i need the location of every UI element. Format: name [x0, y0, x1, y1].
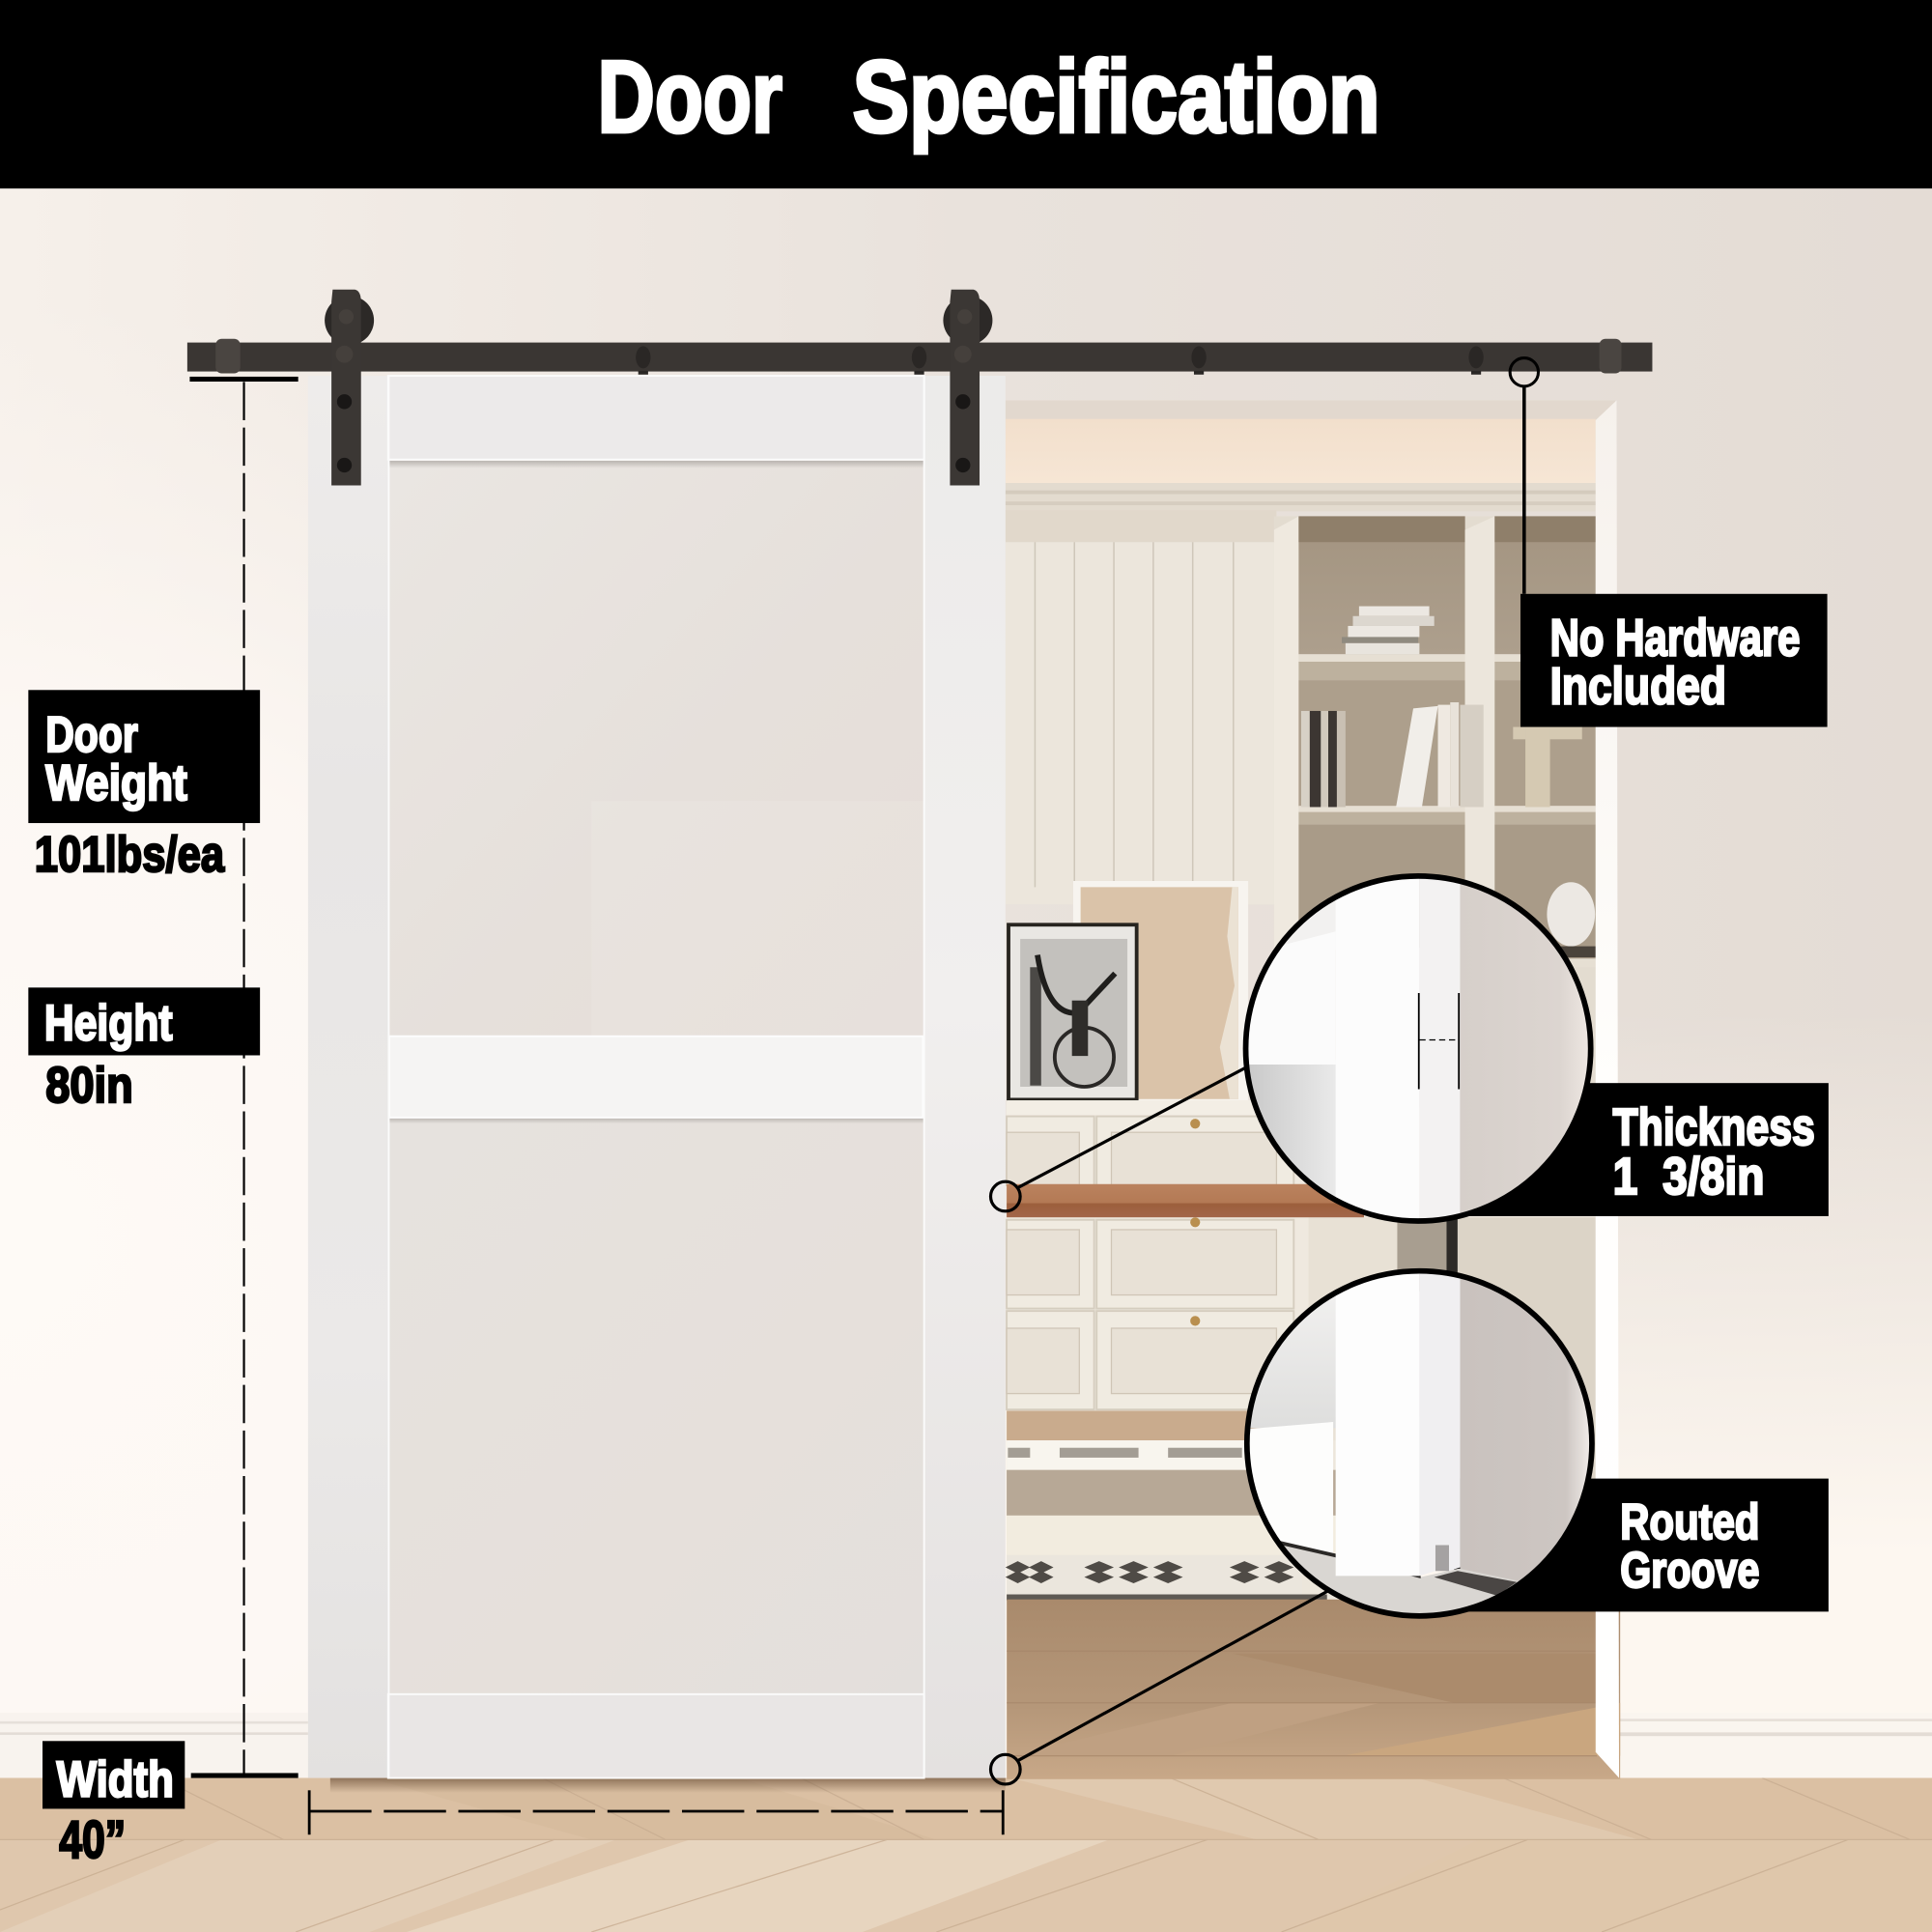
wood countertop	[1007, 1184, 1364, 1217]
left hanger	[325, 290, 374, 486]
lower panel	[389, 1118, 924, 1694]
right stile	[924, 376, 1006, 1778]
ceiling glow	[1006, 419, 1596, 483]
thickness measure marks	[1419, 993, 1459, 1090]
leader: thickness	[991, 1067, 1247, 1211]
label: no hardware included: Included	[1550, 658, 1726, 715]
barn door track	[187, 339, 1652, 375]
label: routed groove: Groove	[1620, 1543, 1759, 1599]
label: no hardware included: No Hardware	[1550, 611, 1801, 668]
value: height: 80in	[45, 1058, 133, 1114]
label: no hardware included	[1520, 594, 1828, 727]
right hanger	[943, 290, 992, 486]
label: width	[43, 1741, 185, 1808]
title: Specification	[853, 40, 1380, 154]
middle rail	[389, 1037, 923, 1118]
doorway soffit	[1006, 401, 1615, 420]
door shadow on floor	[330, 1778, 1006, 1793]
lower cabinets	[1007, 1115, 1596, 1489]
books	[1301, 607, 1484, 807]
label: width: Width	[57, 1752, 174, 1808]
label: thickness: Thickness	[1613, 1099, 1815, 1156]
wood floor	[0, 1778, 1932, 1932]
baseboards	[0, 1713, 1932, 1779]
routed groove notch	[1435, 1545, 1449, 1571]
label: thickness	[1454, 1083, 1829, 1216]
detail circle: routed groove	[1244, 1270, 1596, 1620]
value: width: 40”	[59, 1809, 126, 1869]
sculpture	[1513, 727, 1582, 807]
paneled wall	[1006, 510, 1276, 904]
left stile	[308, 376, 388, 1778]
upper panel	[389, 461, 924, 1037]
bicycle poster	[1007, 923, 1139, 1101]
title	[598, 40, 1380, 154]
width dimension line	[309, 1790, 1003, 1834]
leader: routed groove	[991, 1589, 1331, 1784]
top rail	[388, 376, 924, 460]
detail circle: thickness	[1244, 876, 1593, 1222]
right track stop	[1600, 339, 1622, 373]
value: door weight: 101lbs/ea	[35, 827, 225, 883]
door	[308, 376, 1006, 1778]
title: Door	[598, 40, 782, 154]
label: routed groove: Routed	[1620, 1494, 1759, 1550]
console and art	[1007, 881, 1302, 1117]
vase	[1545, 882, 1596, 967]
header bar	[0, 0, 1932, 188]
rug	[1006, 1440, 1377, 1601]
leader: no hardware	[1510, 358, 1538, 594]
left track stop	[215, 339, 241, 373]
bottom rail	[388, 1694, 924, 1778]
inner wood floor strip	[1007, 1410, 1302, 1441]
inner herringbone floor	[1007, 1600, 1620, 1779]
label: door weight: Weight	[45, 755, 187, 811]
label: routed groove	[1454, 1479, 1829, 1611]
label: door weight	[28, 690, 260, 823]
label: thickness: 1 3/8in	[1613, 1149, 1765, 1206]
label: height: Height	[44, 996, 173, 1052]
room interior behind the door	[1006, 419, 1620, 1779]
built-in shelving	[1274, 516, 1597, 1109]
height dimension line	[189, 377, 298, 1778]
label: height	[28, 987, 260, 1055]
crown molding	[1006, 483, 1596, 511]
beige art	[1073, 881, 1248, 1103]
label: door weight: Door	[45, 707, 138, 763]
door jamb	[1596, 401, 1619, 1778]
